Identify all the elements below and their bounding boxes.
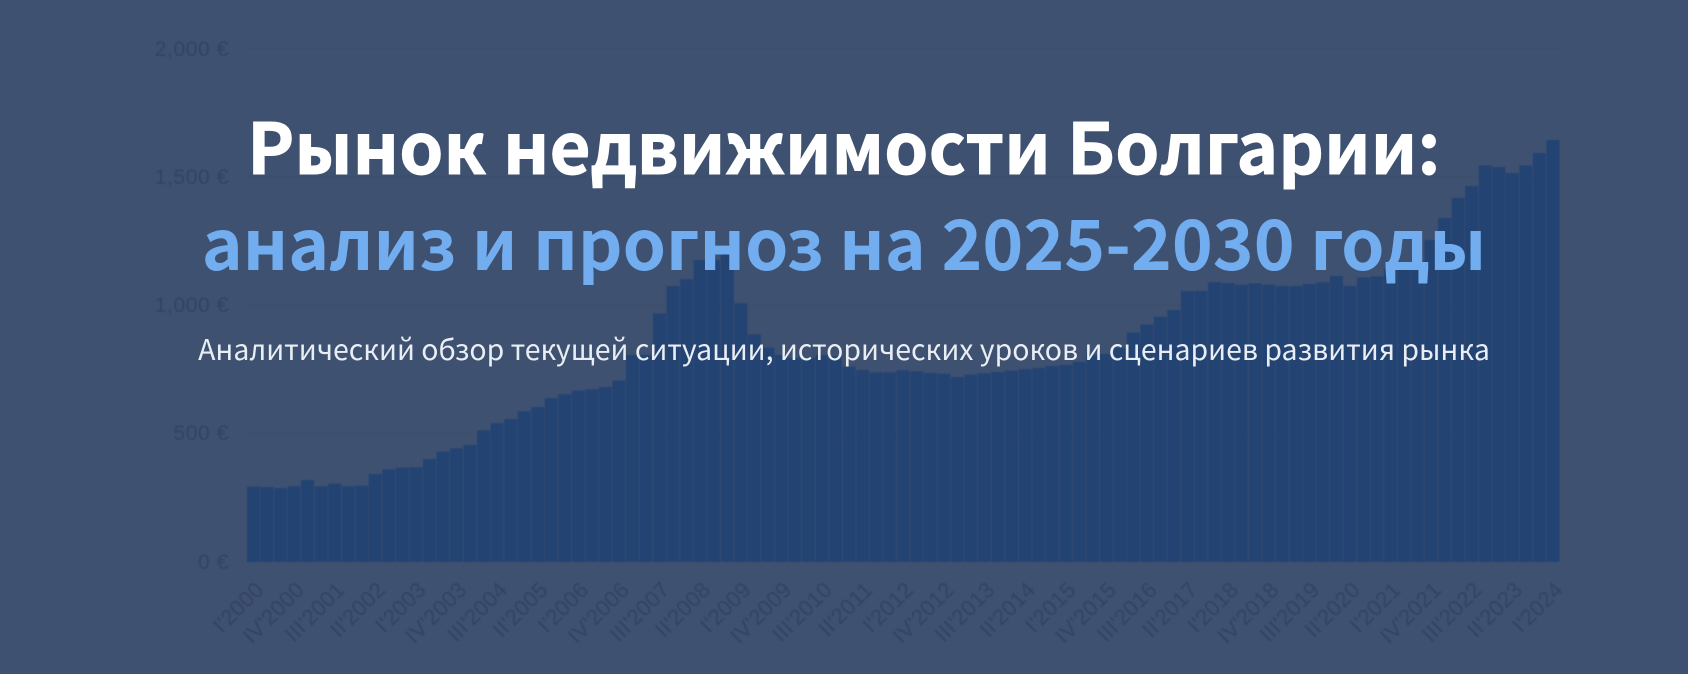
x axis quarter labels: III'2004: [442, 577, 512, 647]
x axis quarter labels: II'2011: [813, 577, 878, 641]
x axis quarter labels: III'2022: [1417, 577, 1487, 647]
x axis quarter labels: II'2020: [1300, 577, 1365, 642]
x axis quarter labels: IV'2021: [1375, 577, 1446, 648]
x axis quarter labels: IV'2003: [400, 577, 472, 648]
x axis quarter labels: IV'2015: [1050, 577, 1121, 648]
x axis quarter labels: IV'2000: [238, 577, 309, 648]
y axis labels: 500 €: [173, 422, 229, 445]
x axis quarter labels: I'2024: [1507, 577, 1568, 638]
x axis quarter labels: II'2017: [1137, 577, 1203, 642]
title: line 2: анализ и прогноз на 2025-2030 годы: [202, 189, 1486, 290]
x axis quarter labels: III'2013: [930, 577, 1000, 647]
x axis quarter labels: IV'2006: [563, 577, 634, 648]
y axis labels: 1,500 €: [155, 166, 229, 189]
x axis quarter labels: I'2006: [533, 577, 593, 638]
y axis labels: [155, 38, 229, 574]
y axis labels: 1,000 €: [155, 294, 229, 317]
x axis quarter labels: I'2015: [1020, 577, 1081, 638]
x axis quarter labels: I'2012: [857, 577, 918, 638]
x axis quarter labels: II'2014: [975, 577, 1040, 642]
x axis quarter labels: III'2007: [605, 577, 675, 647]
x axis quarter labels: IV'2012: [887, 577, 959, 648]
x axis quarter labels: III'2001: [280, 577, 350, 647]
x axis quarter labels: I'2000: [208, 577, 269, 638]
subtitle: Аналитический обзор текущей ситуации, исторических уроков и сценариев развития рынка: [198, 328, 1490, 368]
x axis quarter labels: I'2021: [1345, 577, 1406, 638]
x axis quarter labels: III'2010: [767, 577, 837, 647]
x axis quarter labels: II'2023: [1462, 577, 1527, 642]
x axis quarter labels: IV'2018: [1212, 577, 1284, 648]
x axis quarter labels: IV'2009: [725, 577, 796, 648]
x axis quarter labels: I'2018: [1182, 577, 1243, 638]
x axis quarter labels: III'2019: [1255, 577, 1324, 647]
x axis quarter labels: II'2005: [487, 577, 553, 642]
x axis quarter labels: [208, 577, 1568, 648]
x axis quarter labels: II'2002: [325, 577, 390, 642]
y axis labels: 0 €: [198, 551, 229, 574]
x axis quarter labels: I'2009: [695, 577, 756, 638]
y axis labels: 2,000 €: [155, 38, 229, 61]
title: line 1: Рынок недвижимости Болгарии:: [247, 93, 1441, 195]
x axis quarter labels: II'2008: [650, 577, 715, 642]
bars: [247, 140, 1559, 562]
x axis quarter labels: I'2003: [370, 577, 431, 638]
x axis quarter labels: III'2016: [1092, 577, 1162, 647]
